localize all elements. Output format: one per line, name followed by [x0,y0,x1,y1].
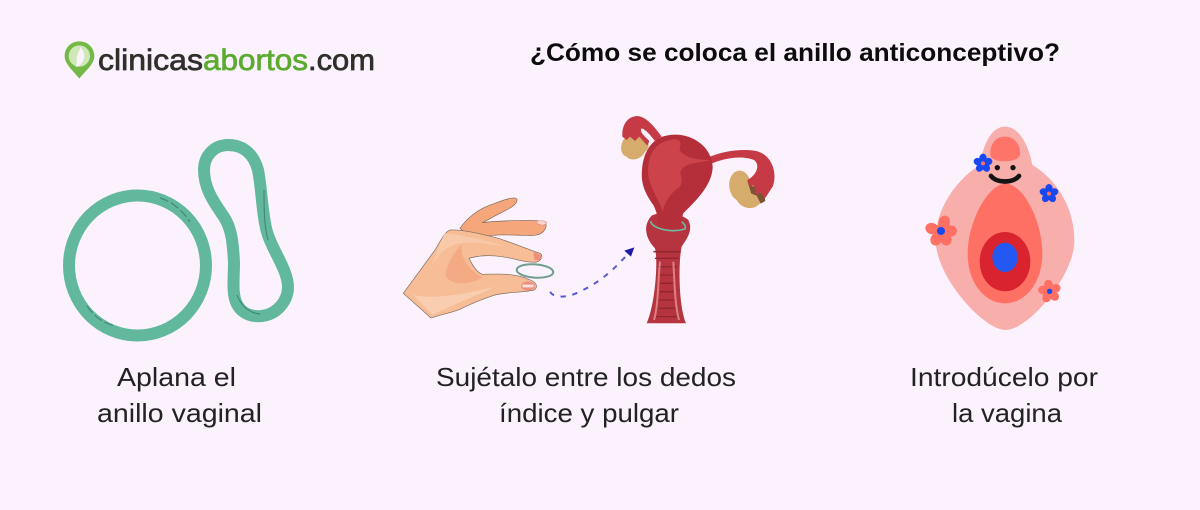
label: step 2: índice y pulgar [499,398,679,428]
panel: step 3 insert the ring [910,127,1098,428]
label: step 1: Aplana el [117,362,236,392]
right ovary [729,171,763,208]
logo: clinicasabortos.com [65,41,375,79]
nails [536,221,547,225]
palm, index and thumb [403,230,542,318]
label: step 3: Introdúcelo por [910,362,1098,392]
arrow: dashed path [550,247,634,297]
logo text: clinicas [98,44,203,77]
label: step 3 [910,362,1098,428]
uterus body [642,135,713,232]
cervix [646,213,690,323]
label: step 1: anillo vaginal [97,398,262,428]
icon: hand holding ring [403,198,554,318]
rear fingers [460,198,546,237]
label: step 2: Sujétalo entre los dedos [436,362,736,392]
blue flower right [1039,184,1059,204]
left ovary [621,136,649,159]
logo text [98,44,375,77]
panel: step 2 hold the ring [403,116,774,428]
face [995,165,1000,170]
logo text: .com [308,44,375,77]
logo text: abortos [203,44,308,77]
coral flower bottom right [1037,279,1062,304]
icon: flattened ring [204,145,288,316]
icon: uterus with ring [621,116,774,323]
icon: illustrated vulva [924,127,1074,330]
ring [516,263,554,279]
right tube [707,150,774,198]
label: step 3: la vagina [952,398,1063,428]
title: ¿Cómo se coloca el anillo anticonceptivo? [530,39,1060,67]
label: step 1 [97,362,262,428]
label: step 2 [436,362,736,428]
icon: round ring [69,196,206,336]
blue flower top left [973,154,993,173]
panel: step 1 flatten the ring [69,145,288,428]
ring in place [651,221,685,231]
left tube [622,116,662,146]
coral flower left [924,214,957,248]
icon: location pin [65,41,94,79]
